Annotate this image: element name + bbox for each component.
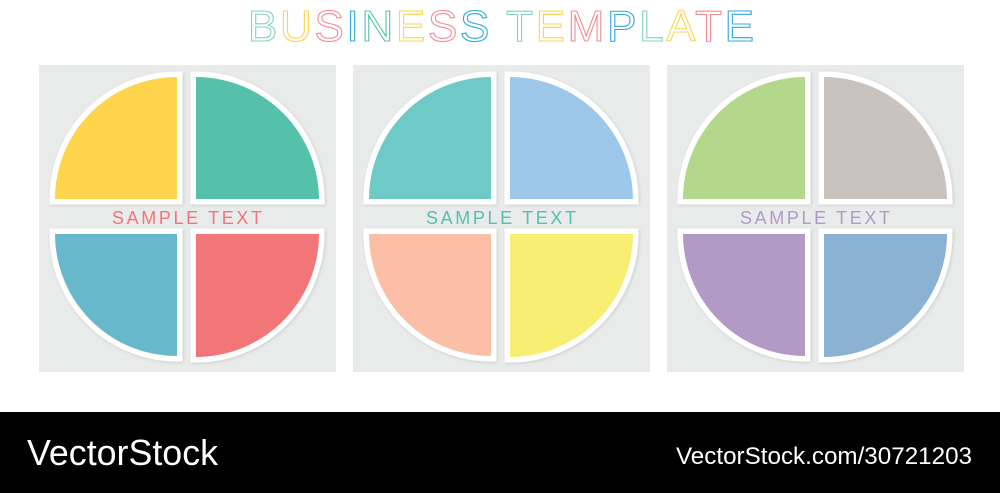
label: SAMPLE TEXT [426,208,576,228]
panel: chart 3 [667,65,964,372]
panel: chart 1 [39,65,336,372]
label: SAMPLE TEXT [112,208,262,228]
logo text: VectorStock [27,432,219,473]
title: BUSINESS TEMPLATE [248,2,754,51]
footer [0,412,1000,493]
id text: VectorStock.com/30721203 [676,443,972,470]
panel: chart 2 [353,65,650,372]
label: SAMPLE TEXT [740,208,890,228]
